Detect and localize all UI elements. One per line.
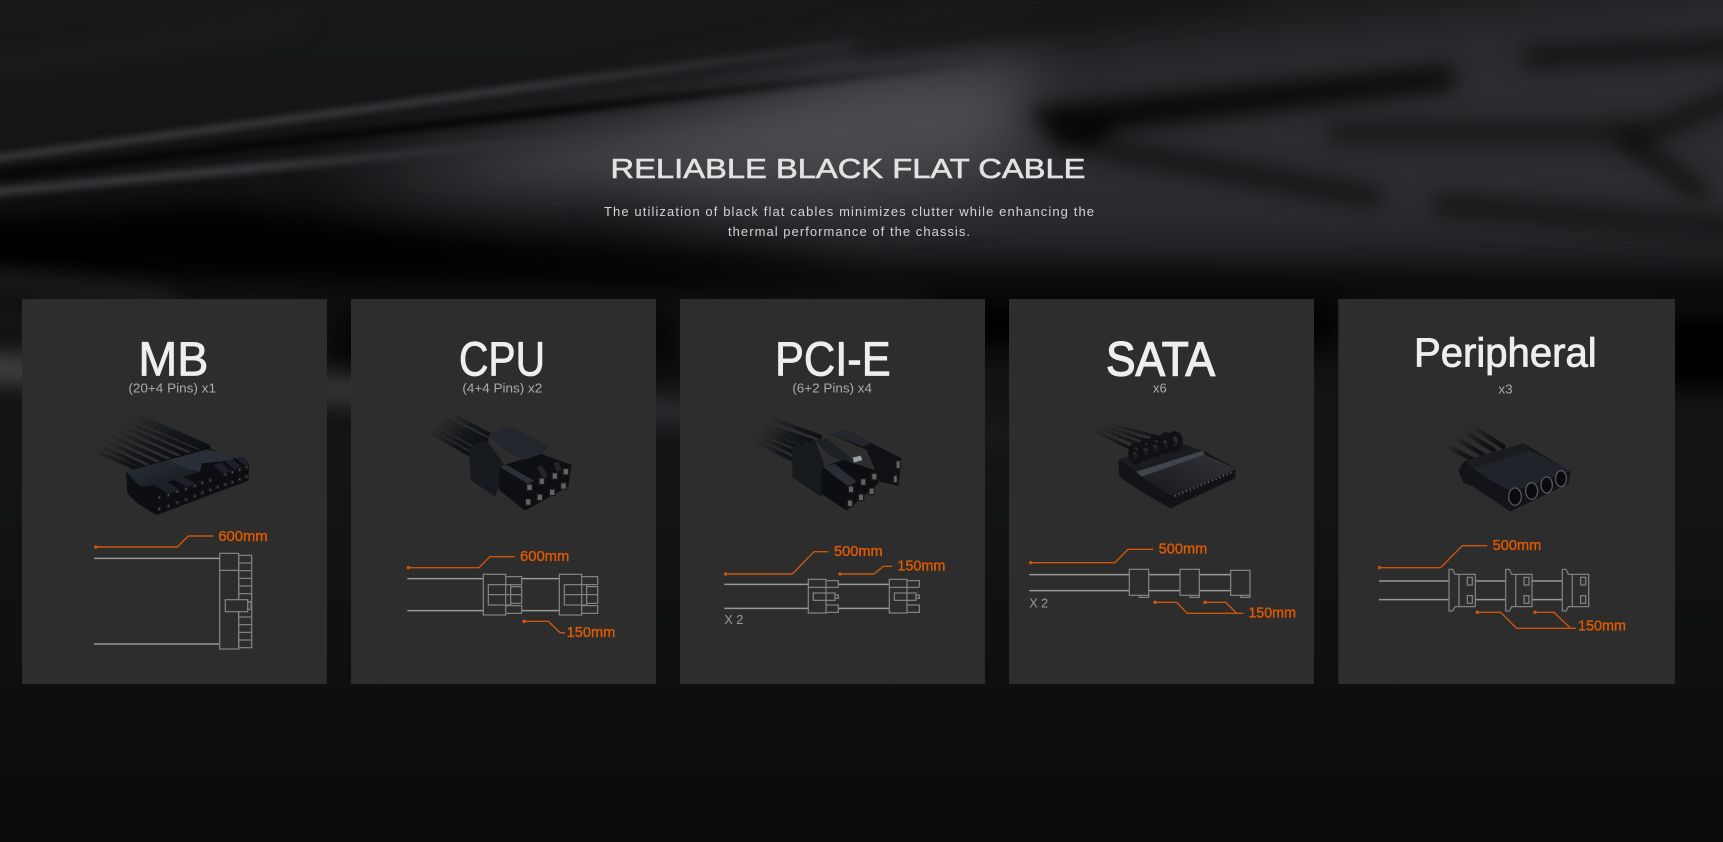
panel: CPU — [351, 299, 656, 684]
subheading: SATA count: x6 — [1153, 381, 1167, 396]
heading: CPU: CPU — [459, 333, 545, 386]
icon: Peripheral connector — [1445, 425, 1571, 511]
length label: 600mm: 600mm — [218, 529, 268, 545]
heading: PCI-E: PCI-E — [775, 333, 891, 386]
length label: 500mm: 500mm — [1493, 538, 1541, 554]
cable diagram: PCI-E — [724, 579, 919, 613]
panel: MB — [22, 299, 327, 684]
icon: MB connector — [93, 414, 250, 515]
description: thermal performance of the chassis. — [728, 224, 970, 239]
length label: 600mm — [407, 549, 569, 569]
description: The utilization of black flat cables minimizes clutter while enhancing the — [604, 204, 1094, 219]
subheading: MB pins: (20+4 Pins) x1 — [128, 381, 216, 396]
length label: 150mm — [1153, 601, 1296, 621]
heading: SATA: SATA — [1106, 333, 1215, 386]
icon: PCI-E connector — [753, 418, 902, 511]
panel: SATA — [1009, 299, 1314, 684]
length label: 500mm — [1029, 541, 1207, 564]
cable diagram: MB — [94, 553, 252, 649]
panel: Peripheral — [1338, 299, 1675, 684]
length label: 600mm: 600mm — [520, 549, 569, 565]
length label: 150mm: 150mm — [567, 625, 615, 641]
length label: 600mm — [94, 529, 268, 549]
cable diagram: CPU — [407, 574, 598, 615]
length label: 150mm: 150mm — [1248, 605, 1296, 621]
length label: 150mm — [1476, 611, 1626, 635]
panel: PCI-E — [680, 299, 985, 684]
length label: 150mm — [522, 620, 615, 641]
cable diagram: SATA — [1029, 569, 1250, 597]
heading: Peripheral: Peripheral — [1414, 330, 1597, 376]
subheading: CPU pins: (4+4 Pins) x2 — [462, 381, 542, 396]
length label: 500mm: 500mm — [1159, 541, 1207, 557]
title: RELIABLE BLACK FLAT CABLE — [610, 153, 1086, 184]
multiplier: X 2: X 2 — [724, 612, 743, 627]
multiplier: X 2: X 2 — [1029, 596, 1048, 611]
length label: 150mm: 150mm — [1578, 619, 1626, 635]
length label: 150mm: 150mm — [897, 559, 945, 575]
description — [604, 204, 1094, 239]
icon: CPU connector — [427, 414, 572, 511]
heading: MB: MB — [138, 333, 208, 386]
length label: 150mm — [838, 559, 945, 576]
subheading: PCI-E pins: (6+2 Pins) x4 — [792, 381, 873, 396]
subheading: Peripheral count: x3 — [1498, 381, 1513, 396]
length label: 500mm — [1378, 538, 1541, 569]
length label: 500mm — [724, 544, 883, 576]
length label: 500mm: 500mm — [834, 544, 883, 560]
icon: SATA connector — [1090, 423, 1237, 508]
cable diagram: Peripheral — [1379, 569, 1589, 611]
